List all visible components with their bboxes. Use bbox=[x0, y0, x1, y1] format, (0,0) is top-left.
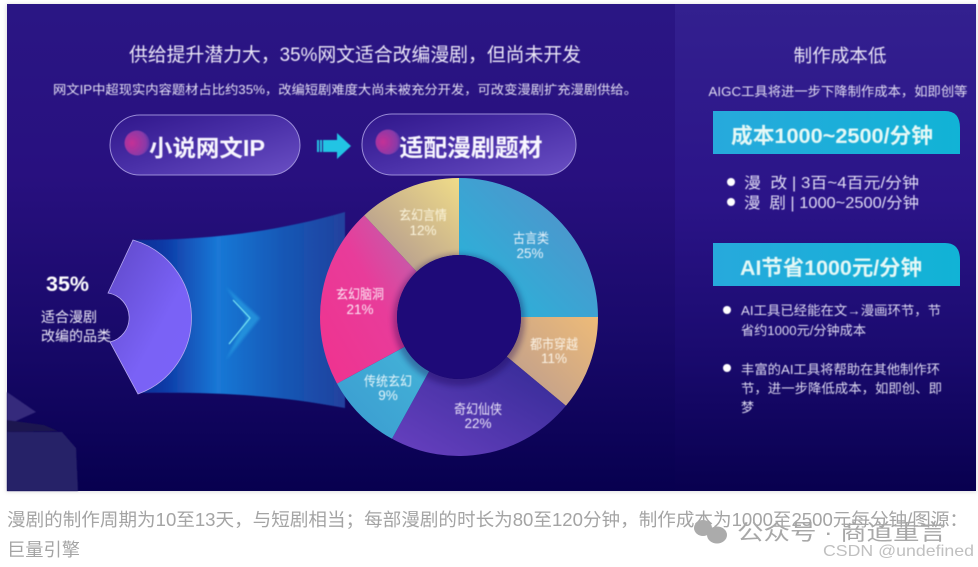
segment: 都市穿越 11% bbox=[507, 317, 598, 406]
stat: 35% bbox=[41, 273, 111, 344]
segment: 都市穿越 11%: 都市穿越 bbox=[530, 336, 578, 352]
caption: 漫剧的制作周期为10至13天，与短剧相当；每部漫剧的时长为80至120分钟，制作成本为1000至2500元每分钟/图源： bbox=[7, 510, 968, 530]
segment: 古言类 25% bbox=[459, 178, 598, 317]
donut chart bbox=[320, 178, 598, 456]
cost list: 漫 剧 | 1000~2500/分钟 bbox=[744, 194, 919, 212]
banner: cost per minute bbox=[713, 111, 960, 154]
pill: novel IP bbox=[110, 115, 300, 175]
segment: 玄幻言情 12%: 12% bbox=[409, 223, 437, 238]
watermark bbox=[694, 520, 974, 560]
segment: 玄幻言情 12% bbox=[364, 178, 459, 272]
35% sector bbox=[108, 240, 191, 394]
segment: 都市穿越 11%: 11% bbox=[541, 351, 567, 366]
banner: AI saving bbox=[713, 243, 960, 286]
banner: cost per minute: 成本1000~2500/分钟 bbox=[731, 124, 933, 148]
caption: 巨量引擎 bbox=[7, 540, 80, 560]
segment: 传统玄幻 9%: 9% bbox=[378, 388, 398, 403]
stat: 35%: 改编的品类 bbox=[41, 328, 111, 344]
AI saving bullets bbox=[723, 303, 942, 415]
AI saving bullets: 丰富的AI工具将帮助在其他制作环 bbox=[741, 362, 940, 377]
cost list bbox=[727, 174, 919, 212]
segment: 玄幻脑洞 21%: 21% bbox=[346, 302, 374, 317]
segment: 玄幻言情 12%: 玄幻言情 bbox=[399, 207, 447, 223]
decorative figure bottom left bbox=[7, 392, 78, 491]
banner: AI saving: AI节省1000元/分钟 bbox=[740, 257, 922, 280]
AI saving bullets: AI工具已经能在文→漫画环节，节 bbox=[741, 303, 941, 318]
watermark: 公众号 · 商道重言 bbox=[737, 520, 946, 545]
segment: 奇幻仙侠 22%: 22% bbox=[464, 416, 492, 431]
segment: 古言类 25%: 古言类 bbox=[513, 231, 549, 246]
AI saving bullets: 省约1000元/分钟成本 bbox=[741, 323, 866, 338]
pill: novel IP: 小说网文IP bbox=[149, 135, 265, 161]
stat: 35%: 35% bbox=[46, 273, 89, 296]
segment: 传统玄幻 9%: 传统玄幻 bbox=[364, 373, 412, 389]
stat: 35%: 适合漫剧 bbox=[41, 309, 97, 325]
cost list: 漫 改 | 3百~4百元/分钟 bbox=[744, 174, 919, 192]
heading: low production cost: 制作成本低 bbox=[794, 46, 886, 66]
arrow bbox=[317, 133, 351, 159]
AI saving bullets: 节，进一步降低成本，如即创、即 bbox=[741, 381, 942, 396]
segment: 玄幻脑洞 21%: 玄幻脑洞 bbox=[336, 286, 384, 302]
subtitle: 网文IP中超现实内容题材占比约35%，改编短剧难度大尚未被充分开发，可改变漫剧扩充漫剧供给。 bbox=[53, 82, 637, 97]
segment: 传统玄幻 9% bbox=[337, 347, 429, 439]
segment: 古言类 25%: 25% bbox=[516, 246, 544, 261]
donut hole bbox=[393, 254, 525, 386]
AI saving bullets: 梦 bbox=[741, 400, 754, 415]
segment: 奇幻仙侠 22% bbox=[392, 357, 566, 456]
chevron icon bbox=[226, 287, 260, 360]
caption bbox=[7, 510, 968, 560]
subheading: AIGC: AIGC工具将进一步下降制作成本，如即创等 bbox=[708, 84, 968, 99]
pill: suitable themes: 适配漫剧题材 bbox=[400, 135, 542, 162]
pill: suitable themes bbox=[362, 114, 576, 175]
watermark: CSDN @undefined bbox=[823, 543, 974, 560]
segment: 玄幻脑洞 21% bbox=[320, 215, 417, 384]
segment: 奇幻仙侠 22%: 奇幻仙侠 bbox=[454, 401, 502, 417]
title: supply potential: 供给提升潜力大，35%网文适合改编漫剧，但尚未开发 bbox=[129, 44, 581, 66]
funnel to donut bbox=[133, 212, 345, 408]
icon: wechat bbox=[694, 520, 727, 544]
